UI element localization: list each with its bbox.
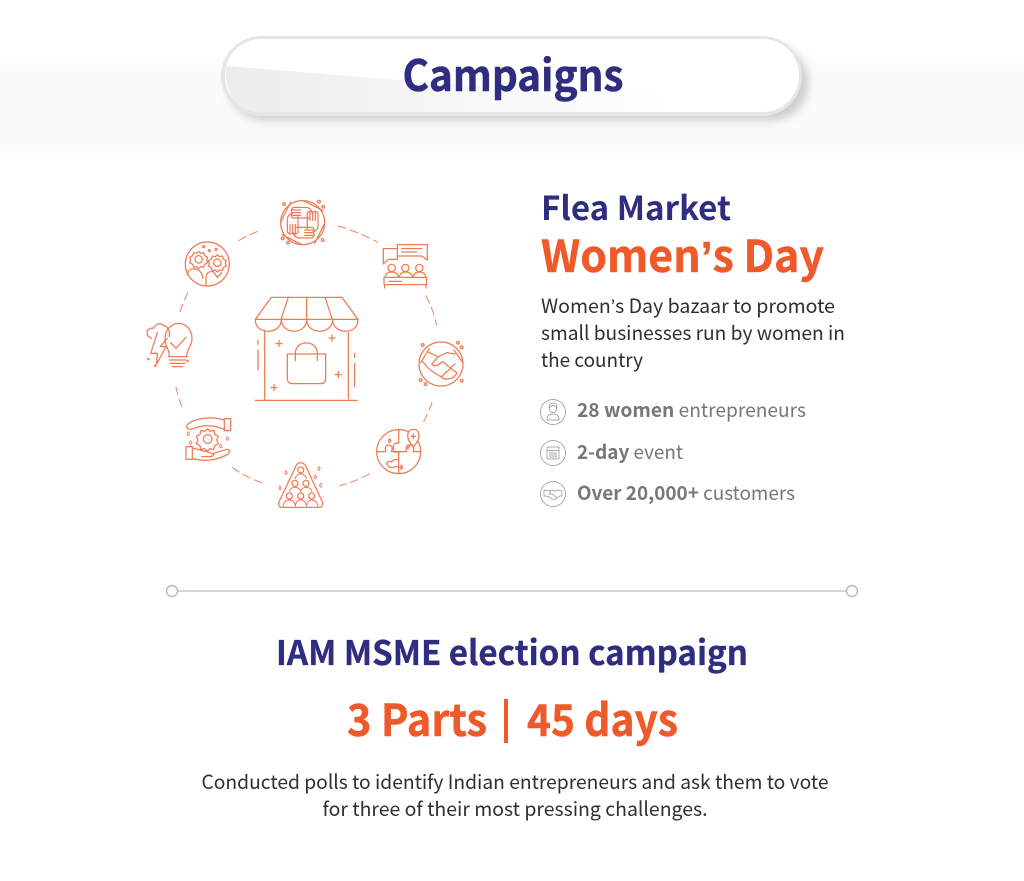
description [541,290,845,373]
dashed ring segments [175,226,437,486]
icon: handshake [540,482,566,506]
text block: flea market [541,182,845,373]
title pill [221,36,808,120]
divider with end circles [166,586,858,596]
icon: handshake [419,341,463,386]
icon: shop with bag [255,297,358,400]
icon: light bulb with cloud and bolt [147,323,192,367]
stat: women entrepreneurs: 28 women entrepreneurs [577,394,806,423]
description: Conducted polls to identify Indian entrepreneurs and ask them to vote [202,766,828,795]
stat: customers: Over 20,000+ customers [577,477,795,506]
heading: election campaign: IAM MSME election campaign [276,626,748,675]
heading: Women’s Day [541,221,824,285]
title: Campaigns [402,42,624,104]
icon: four hands [281,200,325,245]
icon: puzzle with pin [377,429,421,474]
icon: pyramid of people [279,463,323,507]
stat heading: 3 Parts [347,685,487,749]
icon: calendar [540,440,566,466]
stat: event length: 2-day event [577,436,684,465]
description: Women’s Day bazaar to promote [541,290,835,319]
icon: woman [540,400,566,424]
description: for three of their most pressing challenges. [322,793,708,822]
subheading: Flea Market [541,182,731,230]
circular icon ring [147,200,463,507]
description: the country [541,344,643,373]
stat heading [347,685,678,749]
description: small businesses run by women in [541,317,845,346]
icon: hands holding gear [186,418,231,460]
icon: people with gears [185,242,229,286]
description [202,766,828,822]
icon: audience and speech bubbles [383,245,427,288]
stat heading: 45 days [527,685,678,749]
